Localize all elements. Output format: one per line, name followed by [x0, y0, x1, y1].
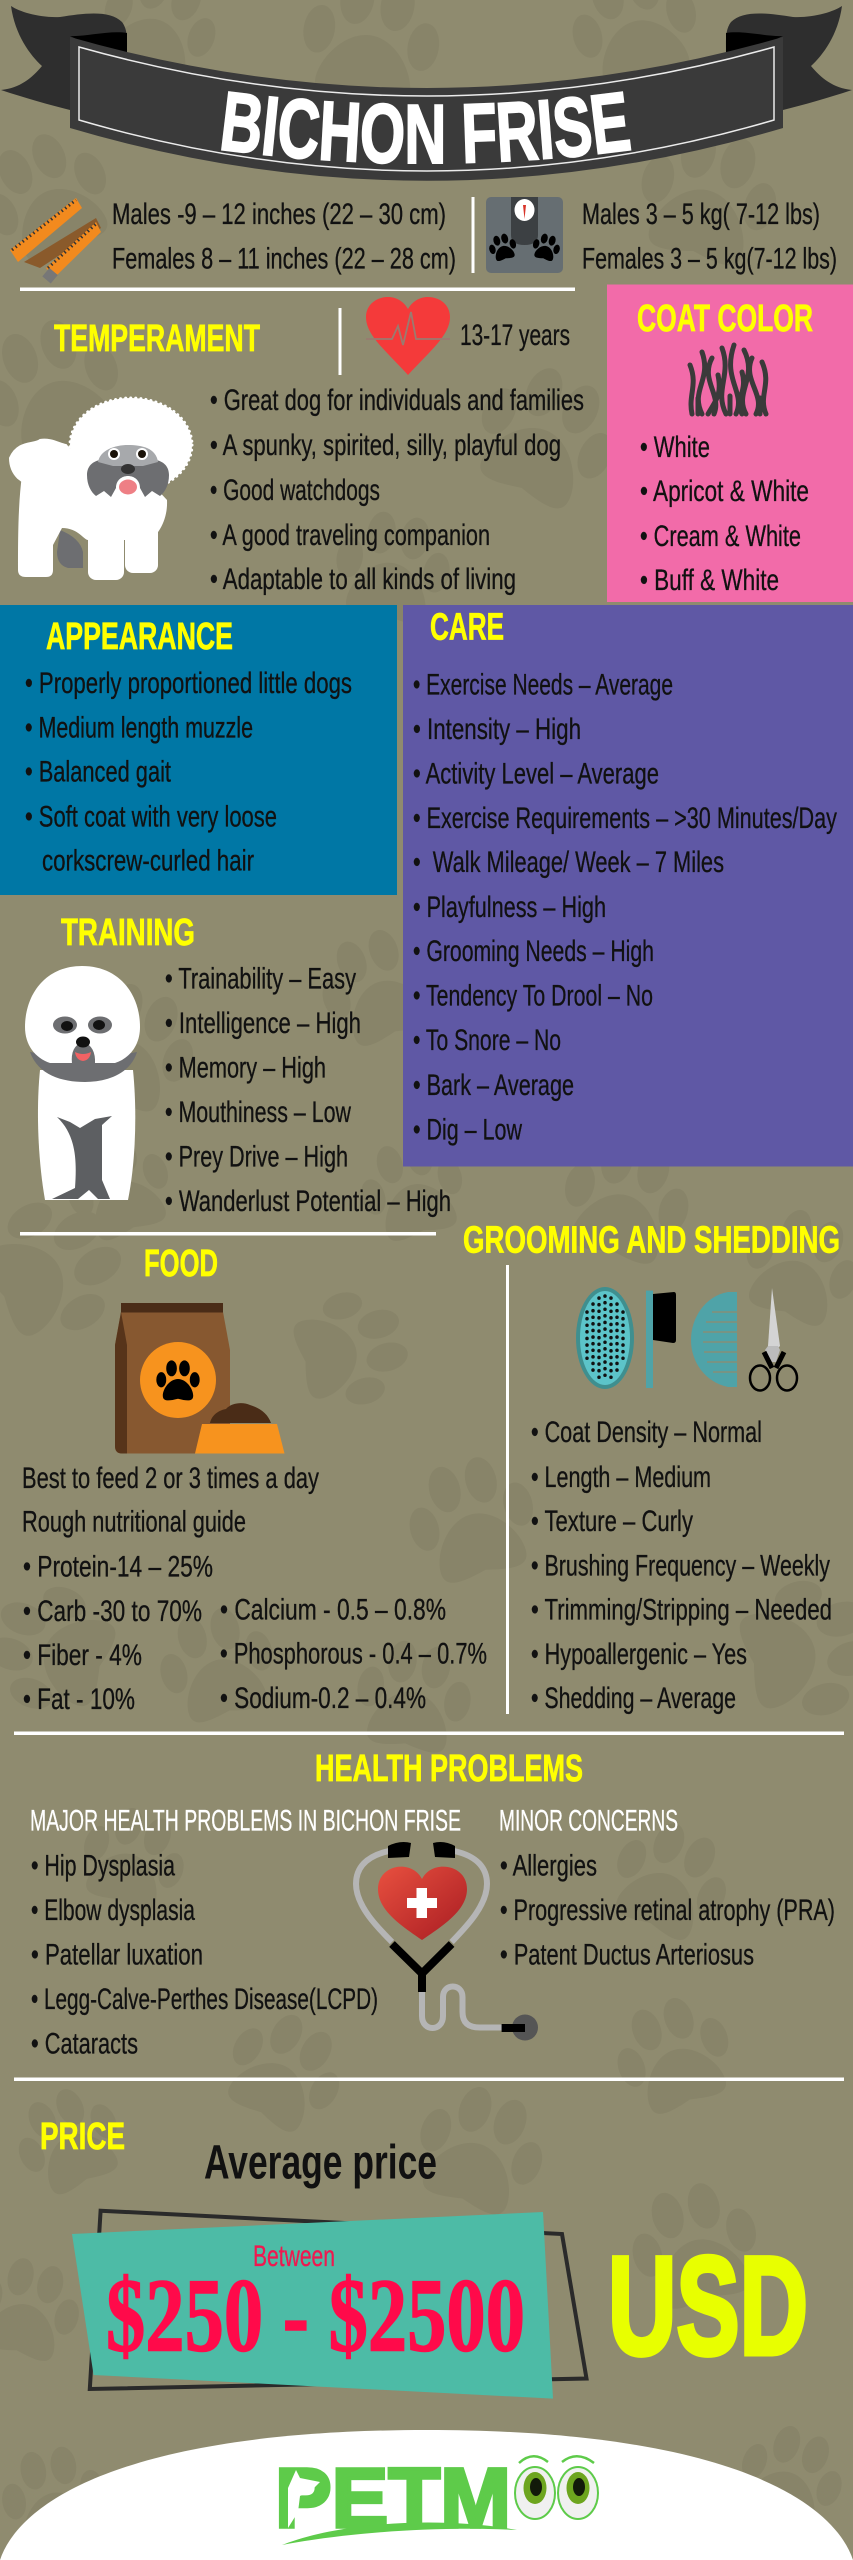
panel: health problems [30, 1748, 835, 2060]
title banner [1, 6, 852, 181]
between label: Between [253, 2240, 335, 2273]
coat color list: • Cream & White [640, 520, 801, 553]
major problems list: • Hip Dysplasia [31, 1850, 175, 1883]
food list: • Calcium - 0.5 – 0.8% [220, 1594, 446, 1626]
appearance list: • Properly proportioned little dogs [25, 667, 352, 700]
care list: • Activity Level – Average [413, 758, 659, 791]
icon: food bag and bowl [115, 1303, 284, 1454]
food list: • Fiber - 4% [23, 1639, 142, 1672]
food list: Best to feed 2 or 3 times a day [22, 1462, 319, 1495]
major problems list: • Cataracts [31, 2028, 138, 2060]
food list: Rough nutritional guide [22, 1506, 246, 1539]
food list: • Protein-14 – 25% [23, 1550, 213, 1583]
coat color list: • White [640, 431, 710, 464]
food list: • Fat - 10% [23, 1683, 135, 1716]
heading: appearance: APPEARANCE [46, 616, 233, 658]
heading: price: PRICE [40, 2116, 125, 2158]
panel: grooming and shedding [463, 1220, 840, 1715]
icon: stethoscope with heart [356, 1842, 538, 2040]
grooming list: • Coat Density – Normal [531, 1416, 762, 1449]
grooming list: • Hypoallergenic – Yes [531, 1638, 747, 1671]
food list: • Phosphorous - 0.4 – 0.7% [220, 1638, 487, 1670]
minor concerns list: • Allergies [500, 1850, 597, 1883]
care list: • Tendency To Drool – No [413, 980, 653, 1013]
training list: • Wanderlust Potential – High [165, 1185, 451, 1218]
temperament list: • Great dog for individuals and families [210, 384, 584, 417]
food list: • Sodium-0.2 – 0.4% [220, 1682, 426, 1715]
food list: • Carb -30 to 70% [23, 1595, 202, 1628]
panel: appearance [0, 605, 397, 895]
appearance list [25, 667, 352, 878]
appearance list: • Balanced gait [25, 756, 171, 789]
icon: measuring tape [10, 198, 101, 283]
footer with logo [0, 2430, 853, 2560]
temperament list: • Good watchdogs [210, 474, 380, 507]
care list [413, 669, 837, 1147]
major problems list: • Elbow dysplasia [31, 1894, 195, 1927]
panel: food [22, 1243, 487, 1716]
temperament list [210, 384, 584, 596]
care list: • Bark – Average [413, 1069, 574, 1102]
heading: health problems: HEALTH PROBLEMS [315, 1748, 583, 1790]
appearance list: corkscrew-curled hair [42, 845, 254, 878]
care list: • Playfulness – High [413, 891, 606, 924]
heading: food: FOOD [144, 1243, 218, 1285]
major problems list [31, 1850, 378, 2060]
heading: care: CARE [430, 607, 504, 649]
height text: Females 8 – 11 inches (22 – 28 cm) [112, 243, 456, 276]
title text: BICHON FRISE [221, 91, 632, 164]
subheading: major health problems: MAJOR HEALTH PROBLEMS IN BICHON FRISE [30, 1805, 461, 1838]
training list: • Trainability – Easy [165, 963, 356, 996]
price tag [72, 2212, 553, 2399]
average price label: Average price [204, 2136, 437, 2189]
panel: care [403, 605, 853, 1166]
care list: • Walk Mileage/ Week – 7 Miles [413, 846, 724, 879]
logo: petmoo: PETM [275, 2451, 511, 2545]
coat color list [640, 431, 809, 597]
illustration: fluffy dog side view [10, 398, 192, 580]
training list: • Prey Drive – High [165, 1140, 348, 1174]
grooming list: • Texture – Curly [531, 1505, 693, 1538]
care list: • Exercise Needs – Average [413, 669, 673, 702]
grooming list: • Shedding – Average [531, 1682, 736, 1715]
training list: • Memory – High [165, 1052, 326, 1085]
minor concerns list: • Patent Ductus Arteriosus [500, 1938, 754, 1972]
care list: • Intensity – High [413, 713, 581, 746]
icon: grooming tools [576, 1287, 797, 1390]
icon: hair strands [690, 345, 766, 414]
height text [112, 198, 456, 276]
appearance list: • Soft coat with very loose [25, 800, 277, 834]
panel: coat color [607, 284, 853, 602]
icon: weighing scale [486, 197, 563, 273]
icon: heart with pulse [366, 297, 450, 375]
price frame [90, 2211, 587, 2389]
panel: price [40, 2116, 808, 2399]
grooming list [531, 1416, 832, 1715]
lifespan: 13-17 years [460, 319, 570, 352]
temperament list: • A spunky, spirited, silly, playful dog [210, 429, 561, 462]
food list [22, 1462, 487, 1716]
care list: • Dig – Low [413, 1114, 522, 1147]
subheading: minor concerns: MINOR CONCERNS [499, 1805, 678, 1838]
care list: • To Snore – No [413, 1024, 561, 1057]
panel: temperament [10, 297, 584, 596]
heading: training: TRAINING [61, 912, 195, 954]
price range: $250 - $2500 [106, 2256, 525, 2373]
major problems list: • Patellar luxation [31, 1938, 203, 1972]
coat color list: • Buff & White [640, 564, 779, 597]
illustration: dog front view [25, 966, 140, 1200]
training list: • Mouthiness – Low [165, 1096, 352, 1129]
training list: • Intelligence – High [165, 1007, 361, 1040]
appearance list: • Medium length muzzle [25, 712, 253, 744]
minor concerns list [500, 1850, 835, 1972]
training list [165, 963, 451, 1218]
height text: Males -9 – 12 inches (22 – 30 cm) [112, 198, 446, 231]
temperament list: • A good traveling companion [210, 519, 490, 552]
grooming list: • Length – Medium [531, 1461, 711, 1494]
care list: • Grooming Needs – High [413, 935, 654, 968]
heading: temperament: TEMPERAMENT [54, 318, 260, 360]
temperament list: • Adaptable to all kinds of living [210, 563, 516, 596]
panel: training [25, 912, 451, 1218]
weight text [582, 198, 837, 276]
major problems list: • Legg-Calve-Perthes Disease(LCPD) [31, 1983, 378, 2016]
